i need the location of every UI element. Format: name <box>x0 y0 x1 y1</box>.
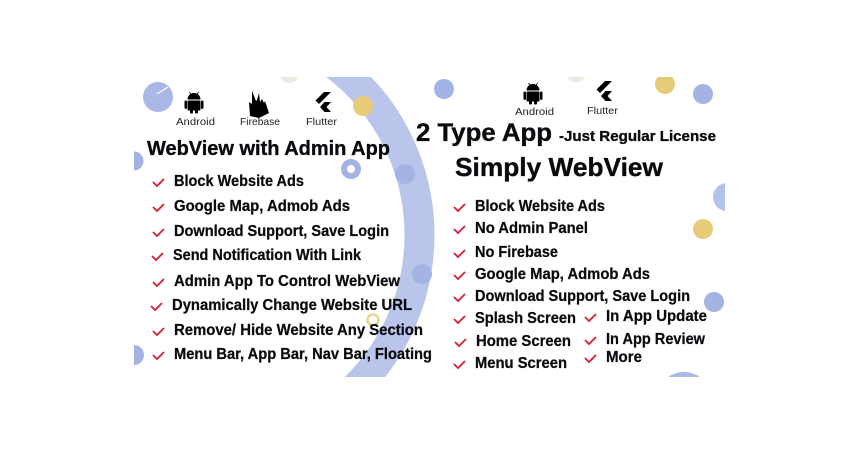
icon: flutter right <box>596 81 612 101</box>
heading: Just Regular License: -Just Regular License <box>559 128 716 145</box>
list: right features: No Firebase <box>475 244 558 261</box>
heading: 2 Type App: 2 Type App <box>416 119 552 147</box>
heading: Simply WebView: Simply WebView <box>455 152 664 182</box>
list: left features: Block Website Ads <box>174 173 304 190</box>
infographic canvas <box>134 77 725 377</box>
panel: background decoration <box>134 77 725 377</box>
list: right features: Home Screen <box>476 333 571 350</box>
list: left features: Remove/ Hide Website Any Section <box>174 322 423 339</box>
list: right features: No Admin Panel <box>475 220 588 237</box>
icon: firebase <box>249 91 269 118</box>
list: right features: Download Support, Save Login <box>475 288 690 305</box>
list: right features: In App Update <box>606 308 707 325</box>
label: Android right: Android <box>515 106 554 118</box>
list: left features: Dynamically Change Website URL <box>172 297 412 314</box>
list: right features: Google Map, Admob Ads <box>475 266 650 283</box>
label: Flutter left: Flutter <box>306 116 338 128</box>
heading: WebView with Admin App: WebView with Admin App <box>147 138 390 160</box>
list: left features <box>151 173 432 363</box>
decoration: dots <box>134 77 725 377</box>
list: left features: Google Map, Admob Ads <box>174 198 350 215</box>
icon: android left <box>184 92 204 114</box>
icon: flutter left <box>316 92 331 112</box>
list: right features: Splash Screen <box>475 310 576 327</box>
list: right features: More <box>606 349 642 366</box>
list: right features: In App Review <box>606 331 706 348</box>
list: left features: Admin App To Control WebView <box>174 273 401 290</box>
list: right features <box>454 198 707 372</box>
icon: android right <box>524 83 542 104</box>
list: left features: Send Notification With Link <box>173 247 361 264</box>
list: right features: Block Website Ads <box>475 198 605 215</box>
decoration: large arc <box>326 77 434 377</box>
list: left features: Download Support, Save Login <box>174 223 389 240</box>
label: Flutter right: Flutter <box>587 105 619 117</box>
list: left features: Menu Bar, App Bar, Nav Bar, Floating <box>174 346 432 363</box>
list: right features: Menu Screen <box>475 355 567 372</box>
label: Firebase: Firebase <box>240 116 280 128</box>
label: Android left: Android <box>176 116 215 128</box>
